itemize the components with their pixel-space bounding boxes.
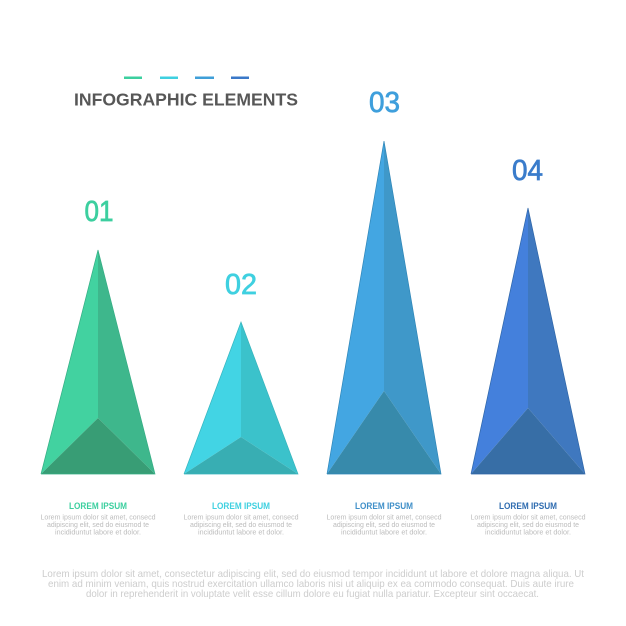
- caption 02: adipiscing elit, sed do eiusmod te: [190, 520, 292, 529]
- pyramid 04: [471, 208, 585, 474]
- caption 01: [40, 501, 156, 536]
- caption 03: Lorem ipsum dolor sit amet, consecd: [326, 512, 442, 522]
- title: INFOGRAPHIC ELEMENTS: [74, 90, 298, 110]
- caption 03: adipiscing elit, sed do eiusmod te: [333, 520, 435, 529]
- caption 04: Lorem ipsum dolor sit amet, consecd: [470, 512, 586, 522]
- caption 04: incididuntut labore et dolor.: [485, 528, 571, 536]
- number 02: 02: [225, 269, 257, 301]
- footer paragraph: Lorem ipsum dolor sit amet, consectetur adipiscing elit, sed do eiusmod tempor incididunt ut labore et dolore magna aliqua. Ut: [42, 569, 584, 580]
- number 03: 03: [369, 87, 400, 119]
- pyramid 02: [184, 322, 298, 474]
- caption 03: incididuntut labore et dolor.: [341, 528, 427, 536]
- caption 02: Lorem ipsum dolor sit amet, consecd: [184, 512, 298, 522]
- caption 03: [326, 501, 442, 536]
- caption 04: adipiscing elit, sed do eiusmod te: [477, 520, 579, 529]
- caption 02: [184, 501, 298, 536]
- caption 01: LOREM IPSUM: [69, 501, 127, 511]
- caption 02: LOREM IPSUM: [212, 501, 270, 511]
- footer paragraph: [42, 569, 584, 600]
- number 01: 01: [84, 196, 114, 228]
- number 04: 04: [512, 155, 543, 187]
- caption 03: LOREM IPSUM: [355, 501, 413, 511]
- caption 01: Lorem ipsum dolor sit amet, consecd: [40, 512, 156, 522]
- footer paragraph: dolor in reprehenderit in voluptate velit esse cillum dolore eu fugiat nulla pariatur. Excepteur sint occaecat.: [86, 589, 539, 600]
- pyramid 03: [327, 141, 441, 474]
- caption 04: LOREM IPSUM: [499, 501, 557, 511]
- caption 04: [470, 501, 586, 536]
- header accent dashes: [124, 76, 249, 79]
- caption 01: adipiscing elit, sed do eiusmod te: [47, 520, 149, 529]
- caption 02: incididuntut labore et dolor.: [198, 528, 284, 536]
- footer paragraph: enim ad minim veniam, quis nostrud exercitation ullamco laboris nisi ut aliquip ex ea commodo consequat. Duis aute irure: [48, 579, 574, 590]
- pyramid 01: [41, 250, 155, 474]
- caption 01: incididuntut labore et dolor.: [55, 528, 141, 536]
